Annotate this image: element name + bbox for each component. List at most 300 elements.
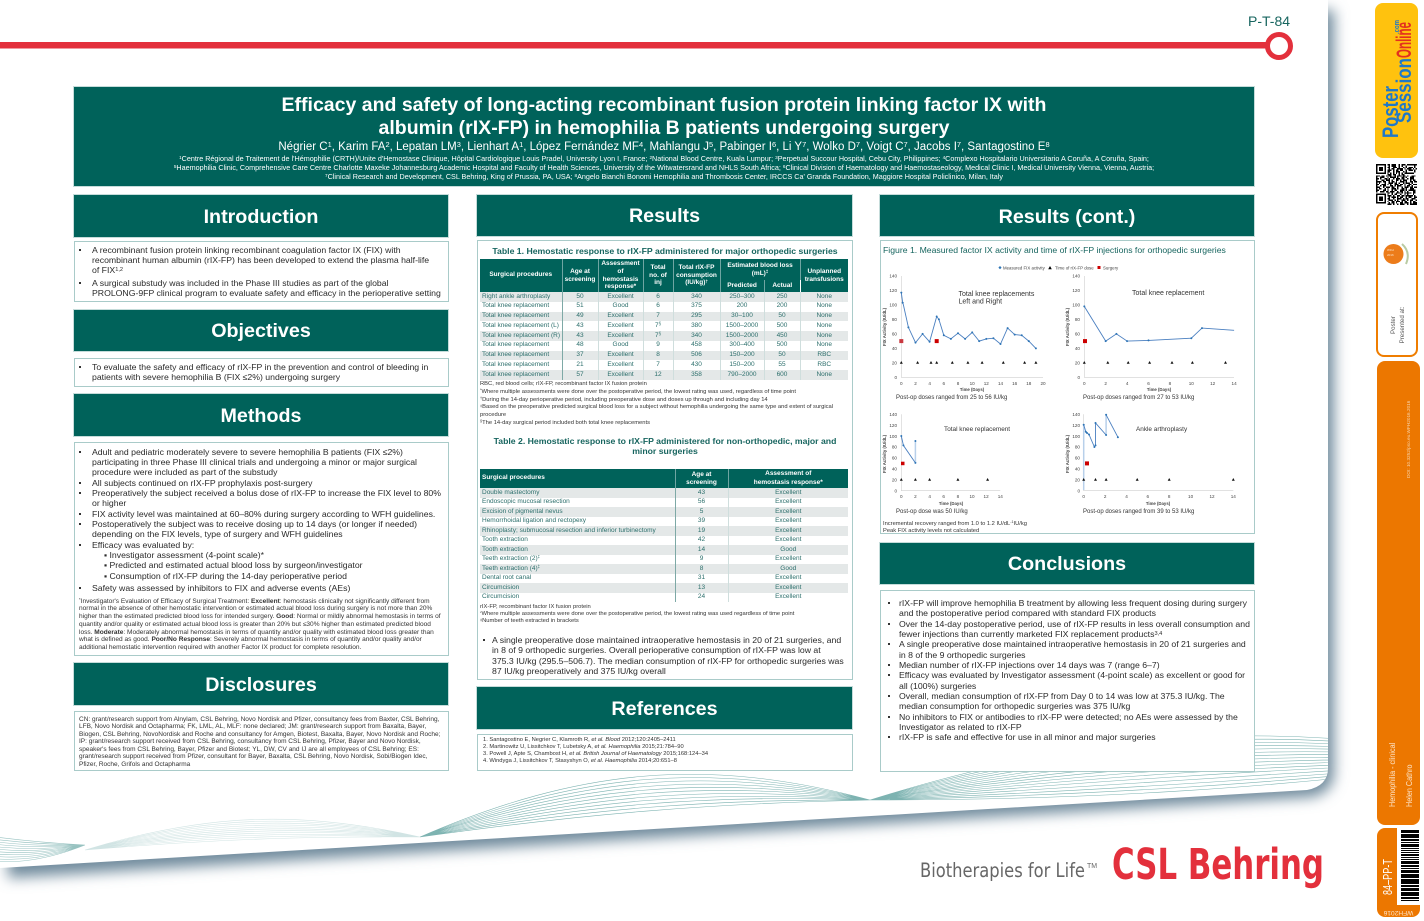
methods footnote: *Investigator's Evaluation of Efficacy of Surgical Treatment: Excellent: hemostasis clinically not significantly different from [79, 597, 430, 604]
results summary bullet: 87 IU/kg preoperatively and 375 IU/kg overall [492, 666, 666, 676]
table 1: Good [613, 341, 628, 348]
table 1: RBC [817, 351, 831, 358]
table 2 title [494, 436, 836, 456]
references list [483, 736, 708, 764]
table 1: no. of [649, 272, 667, 279]
chart: total knee replacements left and right: 0 [894, 375, 897, 380]
icon: WFH congress badge: WFH [1387, 248, 1394, 252]
table 1: Total knee replacement [482, 371, 549, 378]
panel: objectives [74, 358, 449, 387]
conclusions bullets: Investigator as related to rIX-FP [899, 722, 1022, 732]
conclusions bullets: in 8 of the 9 orthopedic surgeries [899, 650, 1026, 660]
chart: total knee replacements left and right: 16 [1012, 381, 1018, 386]
chart: total knee replacement, top right: 4 [1126, 381, 1129, 386]
heading: Objectives [74, 310, 448, 351]
heading: Conclusions: Conclusions [1008, 553, 1126, 575]
chart: ankle arthroplasty: 20 [1075, 478, 1080, 482]
table 1: 43 [576, 322, 584, 329]
chart: ankle arthroplasty: 140 [1072, 412, 1080, 417]
table 1: 6 [656, 293, 660, 300]
table 2: Age at [692, 471, 711, 478]
methods bullets: Safety was assessed by inhibitors to FIX and adverse events (AEs) [92, 583, 350, 593]
chart: total knee replacements left and right: 0 [900, 381, 903, 386]
heading: Results (cont.) [880, 195, 1254, 236]
chart: total knee replacement, top right: 0 [1077, 375, 1080, 380]
table 1: Total knee replacement [482, 361, 549, 368]
table 1: 358 [691, 371, 702, 378]
methods bullets: ▪ Consumption of rIX-FP during the 14-day perioperative period [104, 571, 347, 581]
methods bullets: ▪ Investigator assessment (4-point scale)* [104, 550, 264, 560]
table 1: Total rIX-FP [678, 264, 714, 271]
chart: total knee replacement, top right: 140 [1072, 274, 1080, 279]
table 1: Total knee replacement [482, 351, 549, 358]
disclosures text: Biogen, CSL Behring, NovoNordisk and Roche and consultancy for Amgen, Biotest, Baxalta, Bayer, Novo Nordisk and Roche; [79, 731, 440, 738]
chart: total knee replacements left and right: 10 [970, 381, 975, 386]
table 1: None [816, 293, 832, 300]
conclusions bullets: rIX-FP will improve hemophilia B treatment by allowing less frequent dosing during surgery [899, 598, 1247, 608]
chart: total knee replacement, top right: 20 [1075, 360, 1080, 366]
topic and author text [1387, 743, 1414, 807]
chart: total knee replacements left and right: 140 [889, 274, 897, 279]
chart: total knee replacement, bottom left: 20 [892, 478, 897, 482]
chart: ankle arthroplasty: 12 [1209, 494, 1215, 499]
table 2: 31 [698, 574, 705, 581]
methods bullets: Postoperatively the subject was to receive dosing up to 14 days (or longer if needed) [92, 519, 417, 529]
disclosures text: LFB, Novo Nordisk and Octapharma; FK, LML, AL, MLF: none declared; JM: grant/research support from Baxalta, Bayer, [79, 723, 426, 730]
chart: total knee replacement, bottom left: 2 [914, 494, 917, 499]
CSL Behring logo: TM [1087, 863, 1097, 870]
chart: ankle arthroplasty: 14 [1231, 494, 1236, 499]
table 1: 7 [656, 361, 660, 368]
table 2: 56 [698, 498, 705, 505]
affiliations: 5Haemophilia Clinic, Comprehensive Care Centre Charlotte Maxeke Johannesburg Academic Hospital and Faculty of Health Sciences, University of the Witwatersrand and NHLS South Africa; 6Clinical Division of Haematology and Haemostaseology, Medical Clinic I, Medical University Vienna, Vienna, Austria; [174, 163, 1154, 172]
table 1: screening [565, 276, 595, 282]
chart: total knee replacements left and right: 2 [914, 381, 917, 386]
title: Efficacy and safety of long-acting recombinant fusion protein linking factor IX with [282, 94, 1046, 116]
table 2: Tooth extraction [482, 536, 528, 543]
chart: total knee replacement, top right: 14 [1232, 381, 1237, 386]
table 1: 1500–2000 [726, 322, 758, 329]
chart: total knee replacements left and right: 12 [984, 381, 989, 386]
presented-at text [1390, 307, 1406, 343]
heading: Objectives: Objectives [211, 320, 311, 342]
panel: references [477, 734, 853, 771]
table 1: 600 [777, 371, 787, 378]
table 1: 500 [777, 341, 787, 348]
table 1: 6 [656, 302, 660, 309]
table 1: Excellent [607, 371, 634, 378]
table 2: 8 [700, 564, 703, 572]
table 1: 12 [654, 371, 662, 378]
table 1: 150–200 [729, 361, 755, 368]
chart: total knee replacement, bottom left: 8 [957, 494, 960, 499]
chart: total knee replacement, bottom left: FIX Activity (IU/dL) [882, 434, 887, 473]
table 1: None [816, 302, 832, 309]
chart: total knee replacements left and right: 8 [957, 381, 960, 386]
disclosures text: Pfizer, Roche, Grifols and Octapharma [79, 761, 190, 768]
references list: 1. Santagostino E, Negrier C, Klamroth R, et al. Blood 2012;120:2405–2411 [483, 736, 676, 742]
chart: total knee replacement, bottom left: 14 [998, 494, 1003, 499]
table 2: Excellent [775, 498, 801, 505]
chart: total knee replacements left and right: 80 [892, 317, 897, 322]
table 1: 200 [777, 302, 787, 309]
table 2: 42 [698, 536, 705, 543]
conclusions bullets: all (100%) surgeries [899, 681, 976, 691]
panel: conclusions [880, 590, 1255, 772]
chart: total knee replacement, bottom left: 0 [894, 488, 897, 493]
table 1: 340 [691, 293, 702, 300]
chart: total knee replacement, top right: 0 [1083, 381, 1086, 386]
table 1: 55 [778, 361, 786, 368]
chart: total knee replacement, top right: 2 [1104, 381, 1107, 386]
conclusions bullets: Overall, median consumption of rIX-FP from Day 0 to 14 was low at 375.3 IU/kg. The [899, 691, 1225, 701]
CSL Behring logo: Biotherapies for Life [920, 859, 1085, 882]
table 1: 450 [777, 332, 787, 339]
chart: ankle arthroplasty: 8 [1168, 494, 1171, 499]
chart legend [998, 265, 1119, 270]
chart: total knee replacements left and right: 18 [1026, 381, 1032, 386]
affiliations: 7Clinical Research and Development, CSL Behring, King of Prussia, PA, USA; 8Angelo Bianchi Bonomi Hemophilia and Thrombosis Center, IRCCS Ca' Granda Foundation, Maggiore Hospital Policlinico, Milan, Italy [325, 172, 1003, 181]
table 1: None [816, 312, 832, 319]
text: DOI: 10.3252/pso.eu.WFH2016.2016 [1406, 401, 1411, 478]
results summary bullet [483, 635, 844, 676]
icon: WFH congress badge: 2016 [1387, 253, 1394, 257]
table 2: Excellent [775, 508, 801, 514]
conclusions bullets: and the postoperative period compared with standard FIX products [899, 608, 1156, 618]
figure footnote [883, 520, 1027, 534]
chart: ankle arthroplasty: 40 [1075, 467, 1080, 472]
table 2: 19 [698, 526, 705, 534]
introduction bullets: PROLONG-9FP clinical program to evaluate safety and efficacy in the perioperative setting [92, 288, 441, 298]
chart: ankle arthroplasty [1065, 412, 1236, 515]
table 1 [480, 259, 848, 380]
table 1 footnotes: procedure [480, 412, 506, 418]
table 2: 39 [698, 517, 705, 524]
chart: total knee replacements left and right [882, 274, 1046, 401]
table 1: Predicted [727, 282, 757, 289]
table 2: Excellent [775, 488, 801, 496]
heading: Methods [74, 394, 448, 436]
table 1: 250–300 [729, 293, 755, 300]
chart: total knee replacements left and right: 6 [943, 381, 946, 386]
chart: total knee replacements left and right: Total knee replacements [958, 291, 1035, 298]
table 1: 340 [691, 332, 702, 339]
table 2: Dental root canal [482, 574, 531, 581]
figure title: Figure 1. Measured factor IX activity and time of rIX-FP injections for orthopedic surgeries [883, 245, 1226, 255]
table 1: Total knee replacement (R) [482, 332, 560, 339]
methods footnote: quantity and/or quality or estimated actual blood loss is greater than 20% but ≤30% higher than estimated predicted blood [79, 621, 431, 628]
chart: total knee replacement, bottom left: 140 [889, 412, 897, 417]
conclusions bullets: Efficacy was evaluated by Investigator assessment (4-point scale) as excellent or good for [899, 670, 1245, 680]
table 2: Good [780, 546, 796, 552]
table 2: Rhinoplasty; submucosal resection and inferior turbinectomy [482, 526, 656, 534]
table 1: Total knee replacement [482, 302, 549, 309]
table 2: Tooth extraction [482, 546, 528, 552]
chart: total knee replacement, bottom left: 12 [984, 494, 989, 499]
chart: ankle arthroplasty: 10 [1188, 494, 1194, 499]
table 1: 500 [777, 322, 787, 329]
chart: total knee replacements left and right: Post-op doses ranged from 25 to 56 IU/kg [896, 395, 1007, 401]
disclosures text: IP: grant/research support received from CSL Behring, consultancy from CSL Behring, Pfizer, Bayer and Novo Nordisk, [79, 738, 421, 745]
sidebar: orange info panel [1377, 361, 1420, 825]
table 1: Excellent [607, 351, 634, 358]
table 1 footnotes: †During the 14-day perioperative period, including preoperative dose and doses up through and including day 14 [480, 396, 768, 402]
table 2: Assessment of [765, 470, 811, 477]
table 1: Good [613, 302, 628, 309]
heading: Conclusions [880, 543, 1254, 584]
table 2: 14 [698, 546, 705, 552]
chart: total knee replacements left and right: 120 [889, 288, 897, 293]
table 1: None [816, 332, 832, 339]
methods footnote: normal in the absence of other hemostatic intervention or estimated actual blood loss during surgery is not more than 20% [79, 605, 432, 612]
table 1: Excellent [607, 332, 634, 339]
table 1 footnotes: *Where multiple assessments were done over the postoperative period, the lowest rating was used, regardless of time point [480, 388, 796, 395]
table 1: response* [605, 283, 636, 290]
table 2: Excellent [775, 593, 801, 600]
table 1: Total knee replacement (L) [482, 322, 559, 329]
chart: ankle arthroplasty: 60 [1075, 456, 1080, 461]
chart: total knee replacement, top right: Total knee replacement [1132, 290, 1204, 297]
table 1: Total [650, 264, 666, 271]
table 2: Excellent [775, 584, 801, 590]
table 1: 506 [691, 351, 702, 358]
panel: disclosures [74, 711, 449, 771]
table 1: transfusions [805, 276, 844, 282]
objectives bullet: patients with severe hemophilia B (FIX ≤2%) undergoing surgery [92, 372, 340, 382]
table 1: Actual [772, 282, 792, 289]
chart: ankle arthroplasty: Ankle arthroplasty [1136, 426, 1188, 433]
table 2: 5 [700, 508, 703, 514]
disclosures text: CN: grant/research support from Alnylam, CSL Behring, Novo Nordisk and Pfizer, consultancy fees from Baxter, CSL Behring, [79, 716, 439, 722]
chart: total knee replacement, top right: 60 [1075, 332, 1080, 337]
table 1: 200 [737, 302, 747, 309]
methods footnote: additional hemostatic intervention required with another Factor IX product for complete resolution. [79, 644, 361, 651]
table 1: 7 [656, 312, 660, 319]
table 1: Right ankle arthroplasty [482, 293, 550, 300]
table 1: 21 [576, 361, 584, 368]
results summary bullet: A single preoperative dose maintained intraoperative hemostasis in 20 of 21 surgeries, and [492, 635, 841, 645]
chart: ankle arthroplasty: 4 [1125, 494, 1128, 499]
disclosures text: speaker's fees from CSL Behring, Bayer, Pfizer and Biotest; YL, DW, CV and IJ are all employees of CSL Behring; ES: [79, 746, 419, 753]
table 1: 50 [778, 312, 786, 319]
title block [74, 87, 1254, 186]
table 1 title: Table 1. Hemostatic response to rIX-FP administered for major orthopedic surgeries [492, 246, 838, 256]
table 1: 57 [576, 371, 584, 378]
chart: total knee replacement, top right: 40 [1075, 346, 1080, 351]
conclusions bullets [888, 598, 1250, 742]
conclusions bullets: Over the 14-day postoperative period, use of rIX-FP results in less overall consumption and [899, 619, 1250, 629]
results summary bullet: 375.3 IU/kg (295.5–506.7). The median consumption of rIX-FP for orthopedic surgeries was [492, 656, 844, 666]
heading: Disclosures [74, 663, 448, 705]
chart: total knee replacement, bottom left: 60 [892, 456, 897, 461]
title [282, 94, 1046, 139]
methods footnote [79, 597, 441, 651]
table 1: 300–400 [729, 341, 755, 348]
table 2 footnotes: ‡Number of teeth extracted in brackets [480, 618, 579, 624]
sidebar: PosterSessionOnline logo: .com [1394, 20, 1401, 34]
sidebar: PosterSessionOnline logo [1375, 3, 1418, 158]
methods bullets: Efficacy was evaluated by: [92, 540, 194, 550]
table 2 footnotes: *Where multiple assessments were done over the postoperative period, the lowest rating was used regardless of time point [480, 610, 794, 617]
table 1: 8 [656, 351, 660, 358]
chart: ankle arthroplasty: 80 [1075, 445, 1080, 450]
table 1: Excellent [607, 312, 634, 319]
chart: total knee replacement, top right: 10 [1189, 381, 1194, 386]
CSL Behring logo [920, 840, 1324, 890]
chart: total knee replacement, bottom left [882, 412, 1010, 515]
chart: ankle arthroplasty: 100 [1072, 434, 1080, 439]
table 2 footnotes: rIX-FP, recombinant factor IX fusion protein [480, 604, 591, 610]
conclusions bullets: No inhibitors to FIX or antibodies to rIX-FP were detected; no AEs were assessed by the [899, 712, 1238, 722]
chart: total knee replacement, top right: 100 [1072, 303, 1080, 308]
introduction bullets: A surgical substudy was included in the Phase III studies as part of the global [92, 278, 389, 288]
chart: total knee replacements left and right: Left and Right [958, 298, 1002, 306]
chart: total knee replacement, top right: 12 [1210, 381, 1216, 386]
methods footnote: what is defined as good. Poor/No Response: Severely abnormal hemostasis in terms of quantity and/or quality and/or [79, 636, 422, 643]
methods bullets: FIX activity level was maintained at 60–80% during surgery according to WFH guidelines. [92, 509, 435, 519]
chart: total knee replacement, bottom left: 6 [942, 494, 945, 499]
introduction bullets [79, 244, 441, 298]
table 2: Teeth extraction (4)‡ [482, 564, 540, 572]
chart: total knee replacement, bottom left: 0 [900, 494, 903, 499]
conclusions bullets: fewer injections than currently marketed FIX replacement products3,4 [899, 629, 1162, 639]
references list: 3. Powell J, Apte S, Chambost H, et al. British Journal of Haematology 2015;168:124–34 [483, 751, 708, 757]
table 1 footnotes: RBC, red blood cells; rIX-FP, recombinant factor IX fusion protein [480, 381, 647, 387]
table 2: 24 [698, 593, 705, 600]
table 2: Excellent [775, 517, 801, 524]
table 2: Circumcision [482, 593, 519, 600]
table 1: 48 [576, 341, 584, 348]
references list: 2. Martinowitz U, Lissitchkov T, Lubetsky A, et al. Haemophilia 2015;21:784–90 [483, 744, 684, 750]
table 1: 51 [576, 302, 584, 309]
conclusions bullets: Median number of rIX-FP injections over 14 days was 7 (range 6–7) [899, 660, 1160, 670]
chart legend: Measured FIX activity [1003, 265, 1046, 270]
heading: Methods: Methods [221, 405, 301, 427]
poster number: P-T-84 [1248, 13, 1290, 29]
table 1: Excellent [607, 293, 634, 300]
table 2: Hemorrhoidal ligation and rectopexy [482, 517, 586, 524]
chart legend: Time of rIX-FP dose [1055, 265, 1094, 270]
affiliations: 1Centre Régional de Traitement de l'Hémophilie (CRTH)/Unite d'Hemostase Clinique, Hôpital Cardiologique Louis Pradel, University Lyon I, France; 2National Blood Centre, Kuala Lumpur; 3Perpetual Succour Hospital, Cebu City, Philippines; 4Complexo Hospitalario Universitario A Coruña, A Coruña, Spain; [179, 154, 1149, 163]
chart: total knee replacements left and right: 20 [892, 360, 897, 366]
table 2: Endoscopic mucosal resection [482, 498, 570, 505]
table 1: Surgical procedures [489, 271, 552, 278]
methods footnote: loss. Moderate: Moderately abnormal hemostasis in terms of quantity and/or quality with estimated blood loss greater than [79, 628, 434, 636]
red timeline bar with ring [0, 32, 1293, 60]
table 1: 150–200 [729, 351, 755, 358]
heading: References: References [611, 698, 718, 720]
heading: Results (cont.): Results (cont.) [999, 206, 1135, 228]
introduction bullets: A recombinant fusion protein linking recombinant coagulation factor IX (FIX) with [92, 244, 401, 254]
table 1 footnotes: §The 14-day surgical period included both total knee replacements [480, 419, 650, 426]
chart: ankle arthroplasty: 2 [1104, 494, 1107, 499]
methods footnote: higher than the estimated predicted blood loss for intended surgery. Good: Normal or mildly abnormal hemostasis in terms of [79, 613, 441, 620]
results summary bullet: in 8 of 9 orthopedic surgeries. Overall perioperative consumption of rIX-FP was low at [492, 645, 821, 655]
table 1: None [816, 371, 832, 378]
table 1: 43 [576, 332, 584, 339]
table 1: hemostasis [603, 276, 638, 282]
table 1: None [816, 341, 832, 348]
sidebar: PosterSessionOnline logo: Poster [1378, 86, 1403, 138]
heading: Introduction: Introduction [204, 206, 318, 228]
table 1: 790–2000 [728, 371, 756, 378]
table 1: 50 [778, 351, 786, 358]
table 2: Surgical procedures [482, 474, 545, 481]
table 1: 375 [691, 302, 702, 309]
icon: WFH congress badge [1384, 243, 1409, 264]
table 1: 380 [691, 322, 702, 329]
table 1: Excellent [607, 361, 634, 368]
table 2: Excellent [775, 555, 801, 562]
chart: total knee replacement, bottom left: 120 [889, 423, 897, 428]
table 2: screening [686, 478, 717, 486]
table 2 title: Table 2. Hemostatic response to rIX-FP administered for non-orthopedic, major and [494, 436, 836, 446]
figure footnote: Peak FIX activity levels not calculated [883, 528, 979, 534]
chart: total knee replacement, top right: Post-op doses ranged from 27 to 53 IU/kg [1083, 395, 1194, 401]
chart: total knee replacement, bottom left: Total knee replacement [944, 426, 1010, 433]
affiliations [174, 154, 1154, 181]
table 2: Good [780, 564, 796, 572]
introduction bullets: of FIX1,2 [92, 265, 123, 275]
table 1: Assessment [601, 260, 640, 267]
chart: total knee replacement, bottom left: 100 [889, 434, 897, 439]
table 1: Age at [570, 268, 590, 275]
table 1: 30–100 [731, 312, 753, 319]
chart: total knee replacement, top right: Time (Days) [1147, 387, 1172, 392]
chart: total knee replacements left and right: Time (Days) [960, 387, 985, 392]
table 1: 250 [777, 293, 787, 300]
chart: total knee replacement, top right: 6 [1147, 381, 1150, 386]
panel: methods [74, 442, 449, 656]
chart: ankle arthroplasty: 120 [1072, 423, 1080, 428]
chart: total knee replacement, top right: 8 [1169, 381, 1172, 386]
methods bullets: participating in three Phase III clinical trials and undergoing a minor or major surgical [92, 457, 417, 467]
chart: ankle arthroplasty: 6 [1147, 494, 1150, 499]
methods bullets: ▪ Predicted and estimated actual blood loss by surgeon/investigator [104, 560, 363, 570]
table 2: Double mastectomy [482, 488, 539, 496]
chart legend: Surgery [1103, 265, 1119, 270]
heading: Disclosures: Disclosures [205, 674, 317, 696]
methods bullets: Preoperatively the subject received a bolus dose of rIX-FP to increase the FIX level to 80% [92, 488, 441, 498]
table 2: hemostasis response* [754, 478, 823, 486]
chart: total knee replacement, top right: 120 [1072, 288, 1080, 293]
conclusions bullets: rIX-FP is safe and effective for use in all minor and major surgeries [899, 732, 1156, 742]
chart: total knee replacement, bottom left: 4 [928, 494, 931, 499]
chart: total knee replacement, bottom left: 10 [969, 494, 975, 499]
table 1: Estimated blood loss [727, 262, 793, 269]
table 1 footnotes: ‡Based on the preoperative predicted surgical blood loss for a subject without hemophilia undergoing the same type and extent of surgical [480, 404, 833, 410]
heading: Results [477, 195, 852, 236]
QR code [1376, 164, 1417, 205]
chart: total knee replacements left and right: FIX Activity (IU/dL) [882, 307, 887, 346]
table 2 footnotes [480, 604, 794, 624]
chart: total knee replacement, top right: 80 [1075, 317, 1080, 322]
objectives bullet: To evaluate the safety and efficacy of rIX-FP in the prevention and control of bleeding in [92, 362, 428, 372]
chart: ankle arthroplasty: FIX Activity (IU/dL) [1065, 434, 1070, 473]
table 1: 458 [691, 341, 702, 348]
chart: total knee replacement, bottom left: Time (Days) [939, 501, 964, 506]
disclosures text [79, 716, 440, 768]
table 1: 37 [576, 351, 584, 358]
methods bullets: procedure were included as part of the substudy [92, 467, 277, 477]
text: 84–PP-T [1380, 859, 1395, 895]
chart: total knee replacements left and right: 20 [1040, 381, 1046, 386]
barcode panel [1397, 828, 1420, 905]
table 1: 7§ [655, 321, 661, 329]
chart: total knee replacement, bottom left: 40 [892, 467, 897, 472]
table 2: 9 [700, 555, 703, 562]
table 2: Excellent [775, 526, 801, 534]
